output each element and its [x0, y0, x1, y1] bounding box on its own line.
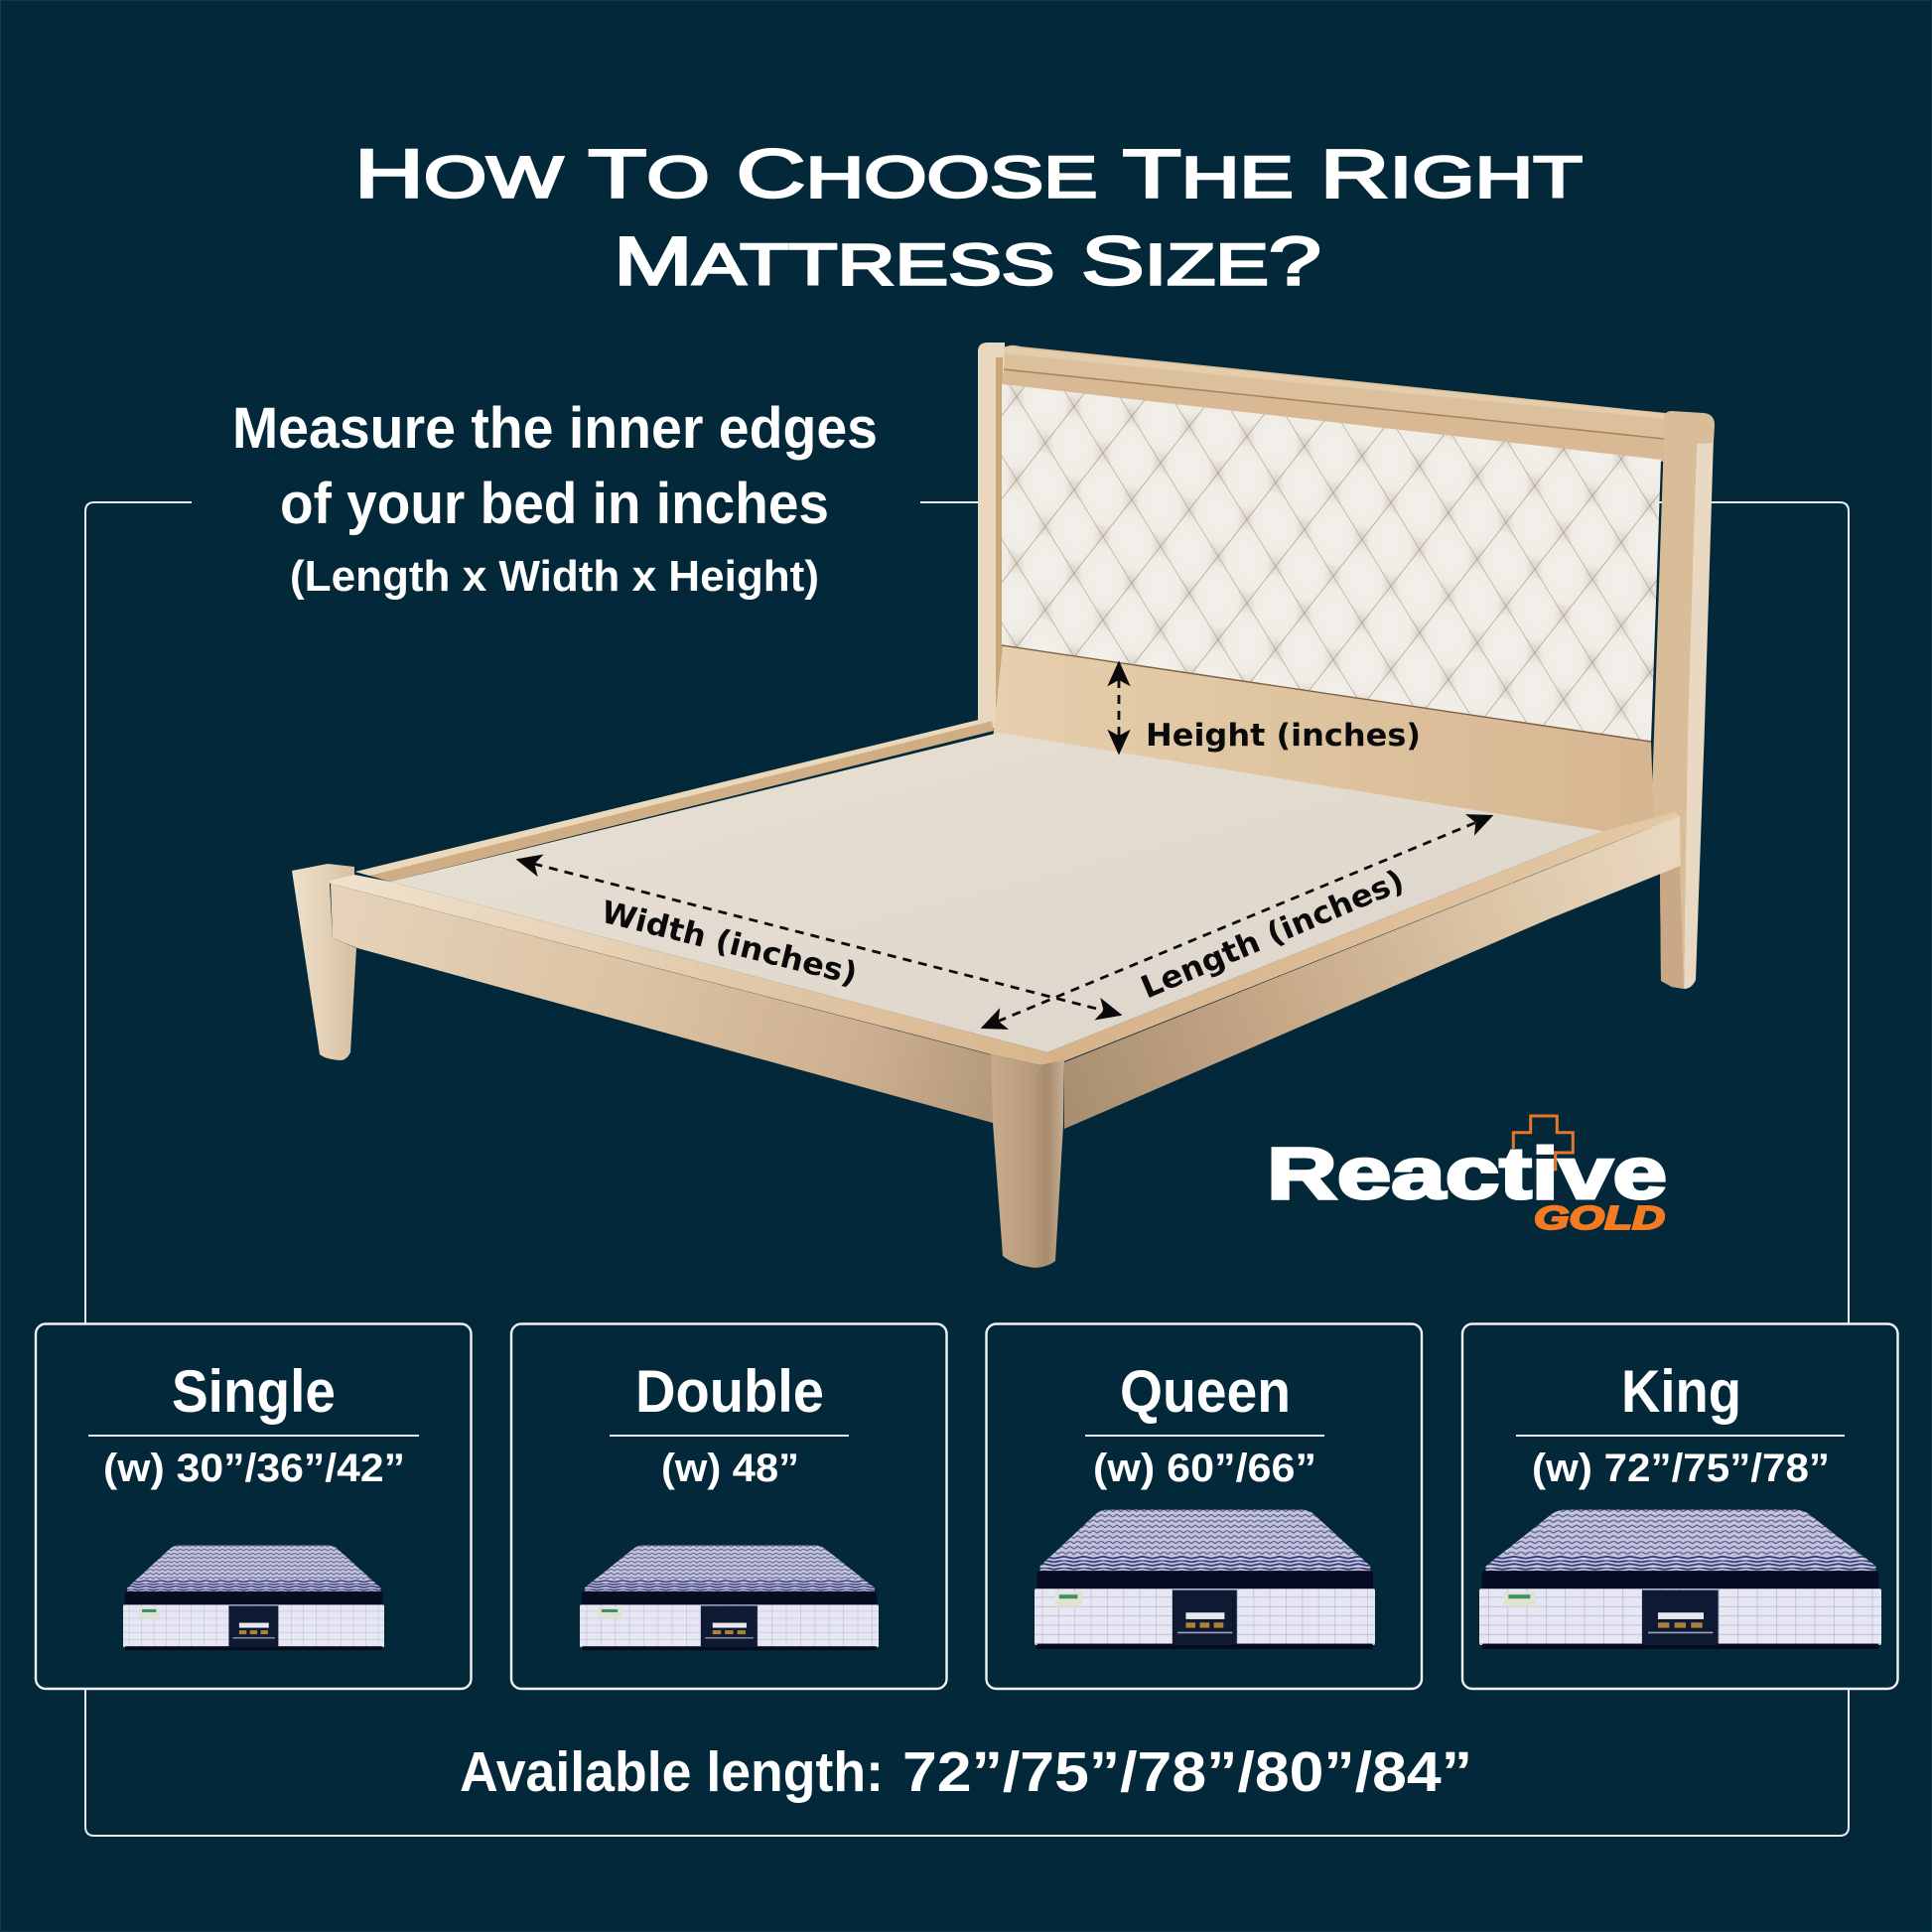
logo: Reactive Gold [1267, 1116, 1667, 1236]
title: M ATTRESS S IZE ? [614, 222, 1321, 300]
title: H OW T O C HOOSE T HE R IGHT [354, 135, 1583, 212]
length arrow [983, 816, 1491, 1028]
outer frame line [85, 502, 1849, 1836]
left front leg [292, 864, 356, 1060]
measuring instruction text: (Length x Width x Height) [290, 552, 819, 601]
panel: double [511, 1324, 947, 1689]
available length note: Available length: [460, 1740, 884, 1804]
title [354, 135, 1583, 300]
headboard [978, 343, 1715, 989]
panel: single [36, 1324, 471, 1689]
single heading: Single [172, 1358, 336, 1425]
mattress platform [390, 733, 1603, 1052]
queen heading: Queen [1120, 1358, 1291, 1425]
length label: Length (inches) [1136, 863, 1410, 1006]
width label: Width (inches) [598, 895, 861, 993]
measuring instruction text [232, 396, 878, 601]
queen mattress [1035, 1510, 1375, 1649]
king heading: King [1621, 1358, 1741, 1425]
corner leg [991, 1054, 1064, 1268]
height arrow [1118, 663, 1120, 753]
front rail [330, 875, 1064, 1123]
measuring instruction text: Measure the inner edges [232, 396, 878, 461]
logo: Reactive Gold: Reactive [1267, 1134, 1667, 1214]
double heading: Double [635, 1358, 824, 1425]
far side rail [355, 717, 994, 882]
bed illustration [292, 343, 1715, 1268]
panel: king [1462, 1324, 1898, 1689]
side rail [1047, 812, 1681, 1129]
panel: queen [987, 1324, 1422, 1689]
width arrow [518, 860, 1120, 1015]
single widths: (w) 30”/36”/42” [103, 1447, 405, 1490]
queen widths: (w) 60”/66” [1093, 1447, 1316, 1490]
king widths: (w) 72”/75”/78” [1532, 1447, 1830, 1490]
measuring instruction text: of your bed in inches [280, 472, 829, 536]
single mattress [123, 1546, 384, 1650]
double mattress [580, 1546, 879, 1650]
available length note [460, 1740, 1472, 1804]
available length note: 72”/75”/78”/80”/84” [902, 1740, 1472, 1804]
king mattress [1479, 1510, 1881, 1649]
double widths: (w) 48” [661, 1447, 799, 1490]
logo: Reactive Gold: GOLD [1534, 1199, 1665, 1236]
height label: Height (inches) [1146, 718, 1421, 754]
